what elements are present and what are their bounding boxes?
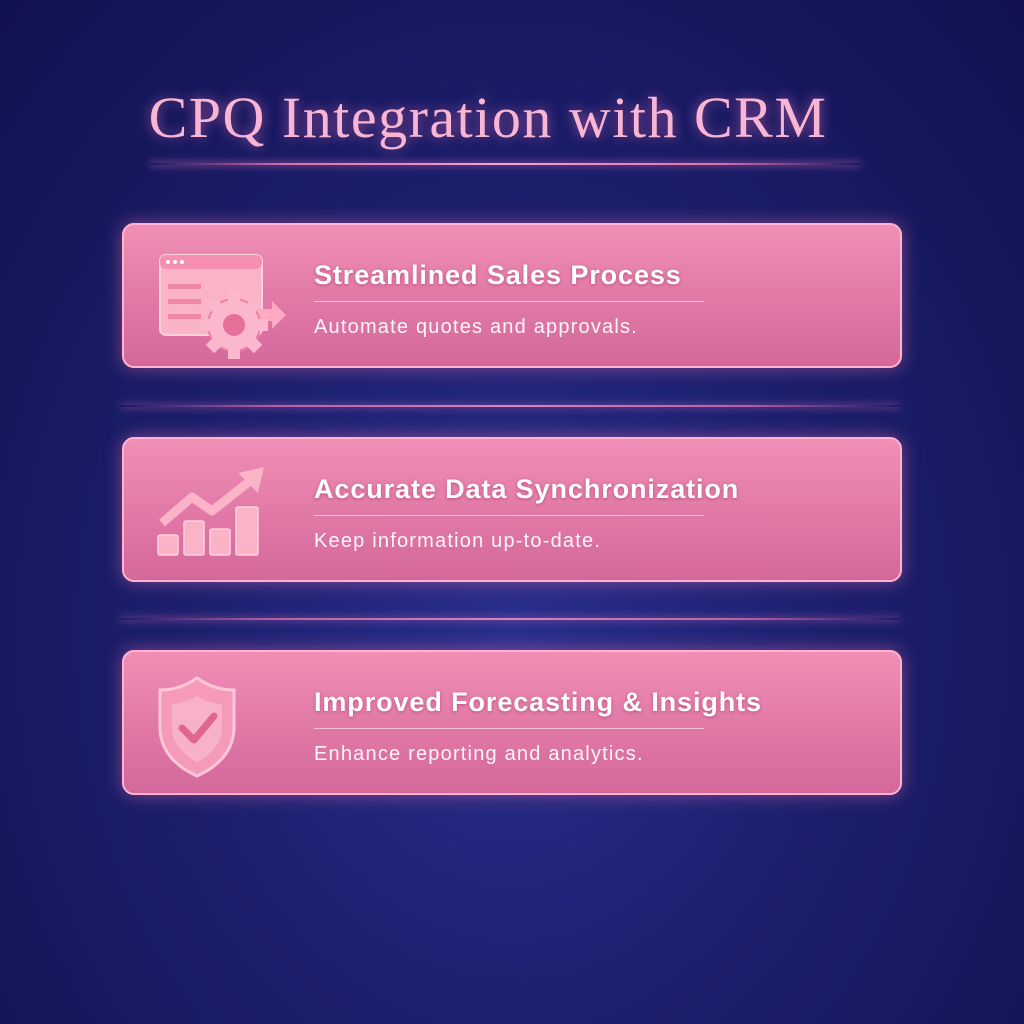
heading: Streamlined Sales Process: [314, 260, 682, 290]
card: streamlined sales process: [122, 223, 902, 368]
card: improved forecasting: [122, 650, 902, 795]
heading: Improved Forecasting & Insights: [314, 687, 762, 717]
heading: Accurate Data Synchronization: [314, 474, 739, 504]
card: accurate data synchronization: [122, 437, 902, 582]
icon: bar chart with arrow: [157, 467, 264, 556]
description: Enhance reporting and analytics.: [314, 743, 644, 765]
icon: shield with check: [158, 676, 236, 778]
description: Automate quotes and approvals.: [314, 316, 638, 338]
icon: window with gear: [159, 254, 286, 359]
title: CPQ Integration with CRM: [149, 85, 827, 150]
description: Keep information up-to-date.: [314, 530, 601, 552]
